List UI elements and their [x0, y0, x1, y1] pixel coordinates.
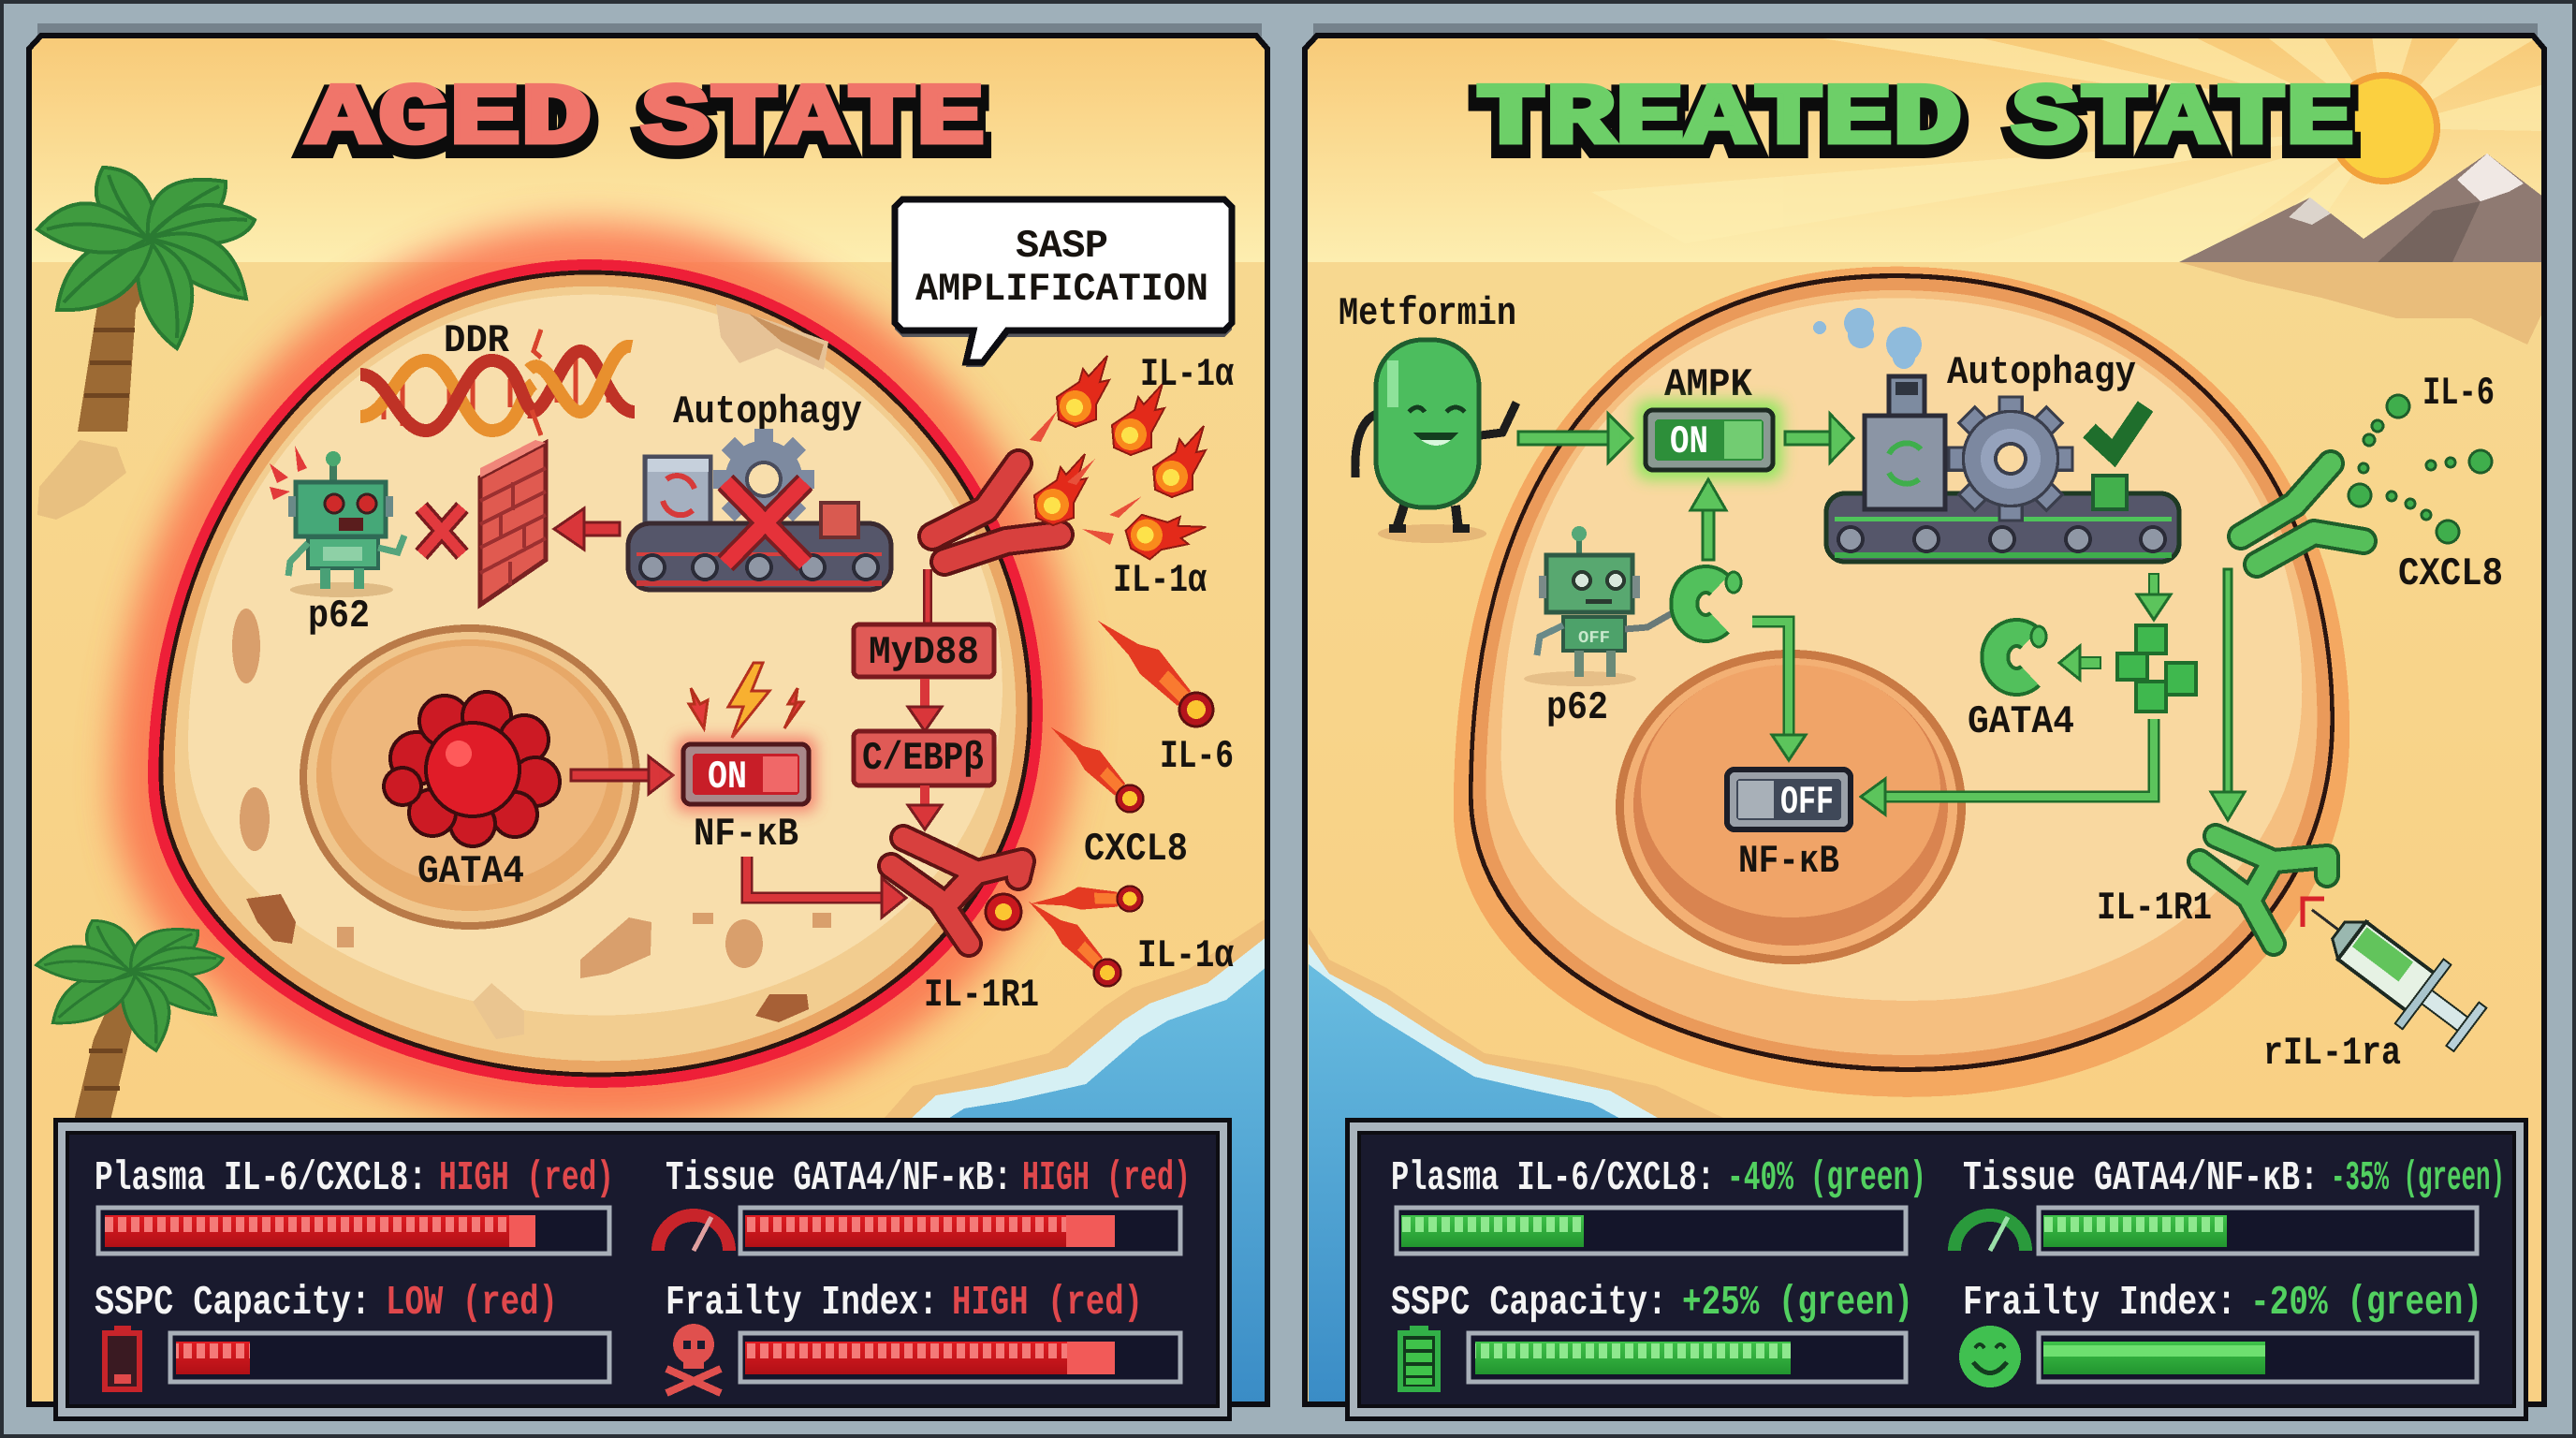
icon: metformin pill character	[1355, 340, 1516, 543]
arrow: GATA4 to NF-κB	[571, 756, 673, 794]
label: IL-1R1 treated: IL-1R1	[2097, 886, 2212, 931]
arrow: C/EBPβ to IL-1R1	[908, 785, 942, 829]
metric: frailty aged	[666, 1280, 1180, 1393]
title: treated state: TREATED	[1476, 78, 1962, 176]
icon: blocked conveyor	[628, 429, 891, 590]
label: NF-κB aged: NF-κB	[694, 812, 798, 857]
metric: plasma aged	[95, 1155, 614, 1254]
label: GATA4 treated: GATA4	[1968, 699, 2074, 744]
icon: brick wall	[480, 440, 546, 605]
label: rIL-1ra: rIL-1ra	[2263, 1031, 2401, 1076]
metric: plasma aged: HIGH (red)	[439, 1155, 614, 1202]
sun rays	[1591, 38, 2541, 210]
panel border left	[29, 36, 1267, 1404]
label: IL-1R1 aged: IL-1R1	[924, 973, 1039, 1018]
cell: aged	[112, 222, 1078, 1125]
metric: plasma treated: Plasma IL-6/CXCL8:	[1391, 1155, 1715, 1202]
title: treated state: STATE	[2012, 70, 2354, 169]
icon: comet horizontal	[1031, 843, 1148, 960]
panel: aged state	[29, 36, 1267, 1404]
label: p62 treated: p62	[1546, 685, 1608, 730]
icon: lightning	[689, 663, 803, 738]
label: DDR: DDR	[444, 318, 510, 363]
nucleus	[300, 624, 640, 930]
receptor: upper red	[932, 463, 1060, 562]
icon: red cross	[421, 507, 462, 554]
icon: calm p62 robot	[1524, 526, 1680, 686]
icon: GATA4 fragments	[2117, 625, 2196, 712]
metric: frailty treated: Frailty Index:	[1963, 1280, 2236, 1327]
icon: comet CXCL8	[1051, 727, 1143, 812]
label: CXCL8: CXCL8	[1084, 827, 1188, 872]
title: treated state: TREATED	[1476, 70, 1962, 169]
icon: comet IL-6	[1098, 621, 1213, 726]
icons: incoming fireballs upper	[1030, 356, 1207, 574]
title: aged state: STATE	[641, 70, 985, 169]
icon: distressed p62 robot	[270, 446, 404, 597]
metric: tissue aged: Tissue GATA4/NF-κB:	[666, 1155, 1012, 1202]
switch: AMPK on: ON	[1670, 419, 1708, 464]
icon: damaged DNA	[360, 330, 635, 435]
box: C/EBPβ: C/EBPβ	[862, 736, 984, 781]
panel border right	[1305, 36, 2544, 1404]
metric: SSPC aged: SSPC Capacity:	[95, 1280, 371, 1327]
receptor: upper green	[2241, 463, 2364, 565]
label: CXCL8 treated: CXCL8	[2398, 551, 2503, 596]
nucleus treated	[1616, 650, 1966, 964]
dashboard: treated metrics	[1345, 1118, 2528, 1421]
sky and sand background left	[29, 36, 1267, 1404]
metric: tissue treated: Tissue GATA4/NF-κB:	[1963, 1155, 2319, 1202]
speech bubble: SASP amplification	[895, 199, 1232, 367]
sky and sand background right	[1305, 36, 2544, 1404]
label: GATA4 aged: GATA4	[417, 849, 524, 894]
arrow: upper receptor to IL-1R1	[2211, 569, 2245, 820]
label: IL-1α lower: IL-1α	[1137, 933, 1235, 978]
mountains	[2179, 154, 2544, 345]
switch: NF-κB on: ON	[708, 755, 747, 800]
metric: frailty treated: -20% (green)	[2250, 1280, 2482, 1327]
cell: treated	[1454, 267, 2349, 1097]
metric: plasma treated	[1391, 1155, 1926, 1254]
arrow: fragments to GATA4	[2059, 646, 2100, 680]
title: aged state	[307, 70, 985, 176]
receptor: IL-1R1 green	[2200, 836, 2327, 944]
icon: sun	[2328, 72, 2440, 184]
label: IL-1α middle: IL-1α	[1113, 558, 1208, 603]
label: AMPK: AMPK	[1664, 362, 1753, 407]
label: Autophagy treated: Autophagy	[1947, 350, 2136, 395]
receptor: IL-1R1 red	[891, 838, 1022, 944]
metric: plasma aged: Plasma IL-6/CXCL8:	[95, 1155, 427, 1202]
metric: tissue treated	[1954, 1155, 2505, 1254]
icon: smoke	[1813, 308, 1922, 369]
title: aged state: AGED	[307, 78, 592, 176]
dashboard: aged metrics	[53, 1118, 1232, 1421]
switch: AMPK on	[1636, 401, 1782, 479]
label: p62 aged: p62	[308, 594, 370, 638]
label: IL-6: IL-6	[1160, 734, 1234, 779]
label: Metformin: Metformin	[1339, 291, 1516, 336]
icon: p62 captured GATA4	[1684, 572, 1741, 628]
icon: bound ligand	[986, 894, 1021, 930]
icon: calm p62 robot: OFF	[1578, 629, 1610, 648]
panel: treated state	[1305, 36, 2544, 1404]
palm tree upper	[37, 168, 255, 520]
arrow: NF-κB to IL-1R1	[747, 857, 906, 917]
metric: frailty aged: Frailty Index:	[666, 1280, 938, 1327]
title: treated state	[1476, 70, 2354, 176]
icon: red block bracket	[2303, 899, 2324, 927]
damage patches	[232, 304, 831, 1039]
label: IL-6 treated: IL-6	[2422, 371, 2495, 416]
ocean left	[885, 917, 1267, 1404]
palm tree lower	[37, 920, 223, 1121]
icon: comet lower	[1029, 902, 1120, 986]
box: MyD88: MyD88	[869, 630, 979, 675]
arrow: AMPK to autophagy	[1785, 414, 1853, 462]
label: NF-κB treated: NF-κB	[1738, 839, 1839, 884]
metric: tissue aged: HIGH (red)	[1022, 1155, 1191, 1202]
icon: GATA4 degraded	[1995, 626, 2046, 682]
label: IL-1α upper: IL-1α	[1140, 352, 1235, 397]
arrow: autophagy to fragments	[2137, 574, 2171, 620]
speech bubble: SASP amplification: AMPLIFICATION	[915, 267, 1208, 312]
switch: NF-κB off: OFF	[1780, 780, 1834, 825]
arrow: MyD88 to C/EBPβ	[908, 679, 942, 731]
metric: frailty treated	[1959, 1280, 2482, 1387]
title: aged state: STATE	[641, 78, 985, 176]
arrow: conveyor to wall	[554, 508, 620, 550]
arrow: fragments to NF-κB	[1861, 719, 2154, 814]
switch: NF-κB off	[1727, 770, 1851, 829]
title: aged state: AGED	[307, 70, 592, 169]
icon: syringe rIL-1ra	[2288, 878, 2495, 1062]
metric: SSPC aged	[95, 1280, 609, 1389]
speech bubble: SASP amplification: SASP	[1016, 224, 1108, 269]
switch: NF-κB on	[676, 737, 816, 812]
metric: tissue aged	[658, 1155, 1191, 1254]
metric: SSPC treated	[1391, 1280, 1913, 1389]
icons: neutralised cytokine dots	[2349, 395, 2492, 543]
metric: frailty aged: HIGH (red)	[952, 1280, 1143, 1327]
arrow: p62 to NF-κB	[1752, 622, 1806, 760]
icon: check mark	[2089, 406, 2145, 453]
arrow: p62 to AMPK	[1690, 479, 1726, 560]
icon: working conveyor	[1826, 376, 2179, 562]
metric: SSPC treated: +25% (green)	[1682, 1280, 1913, 1327]
title: treated state: STATE	[2012, 78, 2354, 176]
metric: plasma treated: -40% (green)	[1727, 1155, 1926, 1202]
metric: SSPC aged: LOW (red)	[386, 1280, 558, 1327]
arrow: metformin to AMPK	[1518, 414, 1632, 462]
label: Autophagy aged: Autophagy	[673, 389, 862, 434]
ocean right	[1309, 927, 1723, 1404]
arrow: receptor to MyD88	[923, 569, 932, 624]
metric: SSPC treated: SSPC Capacity:	[1391, 1280, 1667, 1327]
icon: GATA4 cluster	[384, 692, 560, 846]
